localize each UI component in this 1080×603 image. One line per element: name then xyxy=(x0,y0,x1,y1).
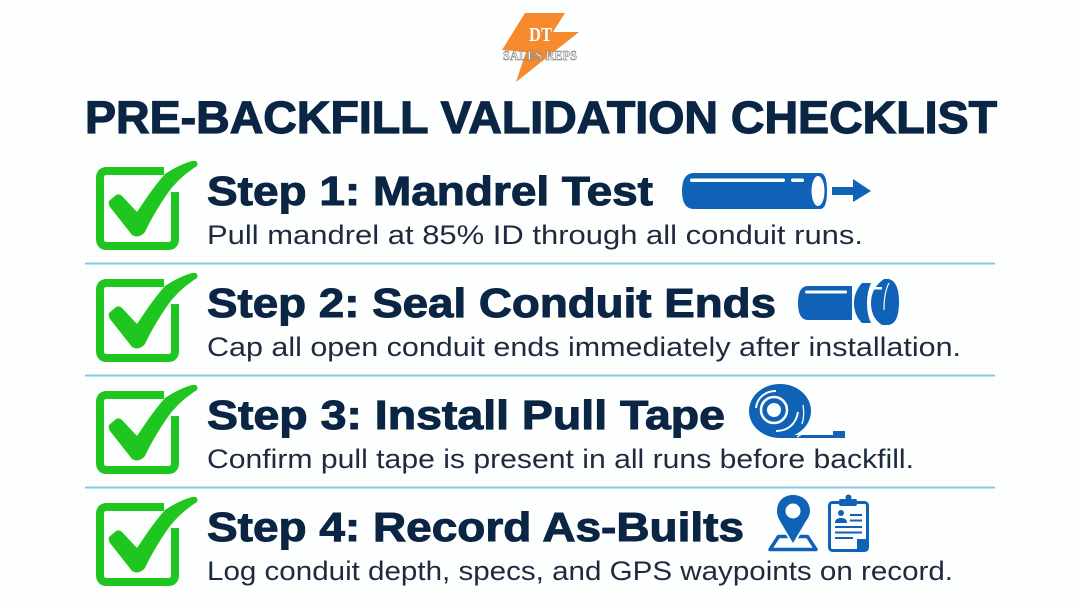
text: step 3 description: Confirm pull tape is present in all runs before backfill. xyxy=(207,444,914,474)
panel: step 2 xyxy=(100,273,961,362)
logo: DT Sales Reps xyxy=(502,13,579,82)
icon: pull tape roll xyxy=(749,384,845,438)
text: step 4 description: Log conduit depth, specs, and GPS waypoints on record. xyxy=(207,556,953,586)
heading: step 4: Step 4: Record As-Builts xyxy=(207,504,744,550)
heading: step 1: Step 1: Mandrel Test xyxy=(207,168,653,214)
icon: conduit with arrow xyxy=(682,173,871,209)
panel: step 4 xyxy=(100,492,953,586)
icon: clipboard record xyxy=(830,494,868,551)
divider 3 xyxy=(85,486,995,488)
panel: step 3 xyxy=(100,384,914,474)
icon: checkbox 1 xyxy=(100,161,197,246)
icon: map pin xyxy=(770,492,816,550)
icon: checkbox 3 xyxy=(100,385,197,470)
icon: orange lightning bolt xyxy=(502,13,579,82)
heading: step 3: Step 3: Install Pull Tape xyxy=(207,392,725,438)
logo text: SALES REPS: SALES REPS xyxy=(503,49,577,64)
divider 2 xyxy=(85,374,995,376)
divider 1 xyxy=(85,262,995,264)
panel: step 1 xyxy=(100,161,871,250)
logo text: DT: DT xyxy=(529,24,553,46)
icon: checkbox 4 xyxy=(100,497,197,582)
text: step 1 description: Pull mandrel at 85% ID through all conduit runs. xyxy=(207,220,863,250)
heading: step 2: Step 2: Seal Conduit Ends xyxy=(207,280,776,326)
icon: conduit with end cap xyxy=(798,279,899,325)
icon: checkbox 2 xyxy=(100,273,197,358)
title: PRE-BACKFILL VALIDATION CHECKLIST xyxy=(85,92,997,143)
text: step 2 description: Cap all open conduit ends immediately after installation. xyxy=(207,332,961,362)
